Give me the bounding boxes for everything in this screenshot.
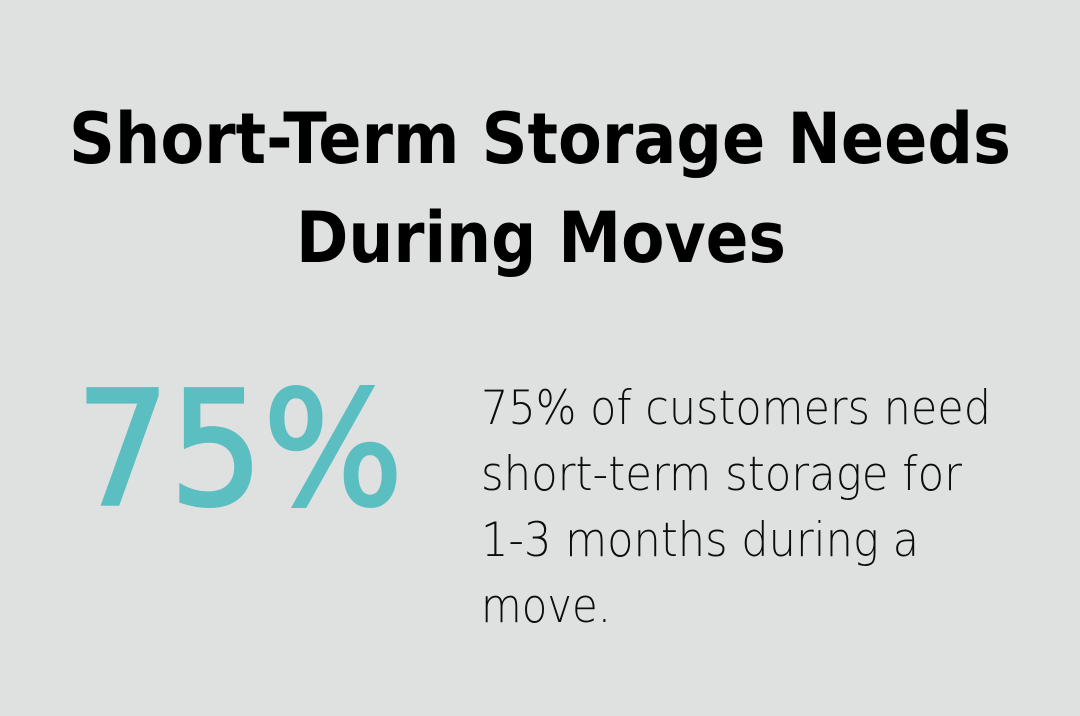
description text	[481, 381, 991, 634]
description text: 75% of customers need	[481, 381, 991, 436]
title: Short-Term Storage Needs	[69, 98, 1011, 180]
description text: 1-3 months during a	[481, 513, 919, 568]
description text: move.	[481, 579, 611, 634]
title	[69, 98, 1011, 279]
title: During Moves	[296, 197, 786, 279]
big stat: 75%: 75%	[76, 358, 403, 542]
description text: short-term storage for	[481, 447, 963, 502]
